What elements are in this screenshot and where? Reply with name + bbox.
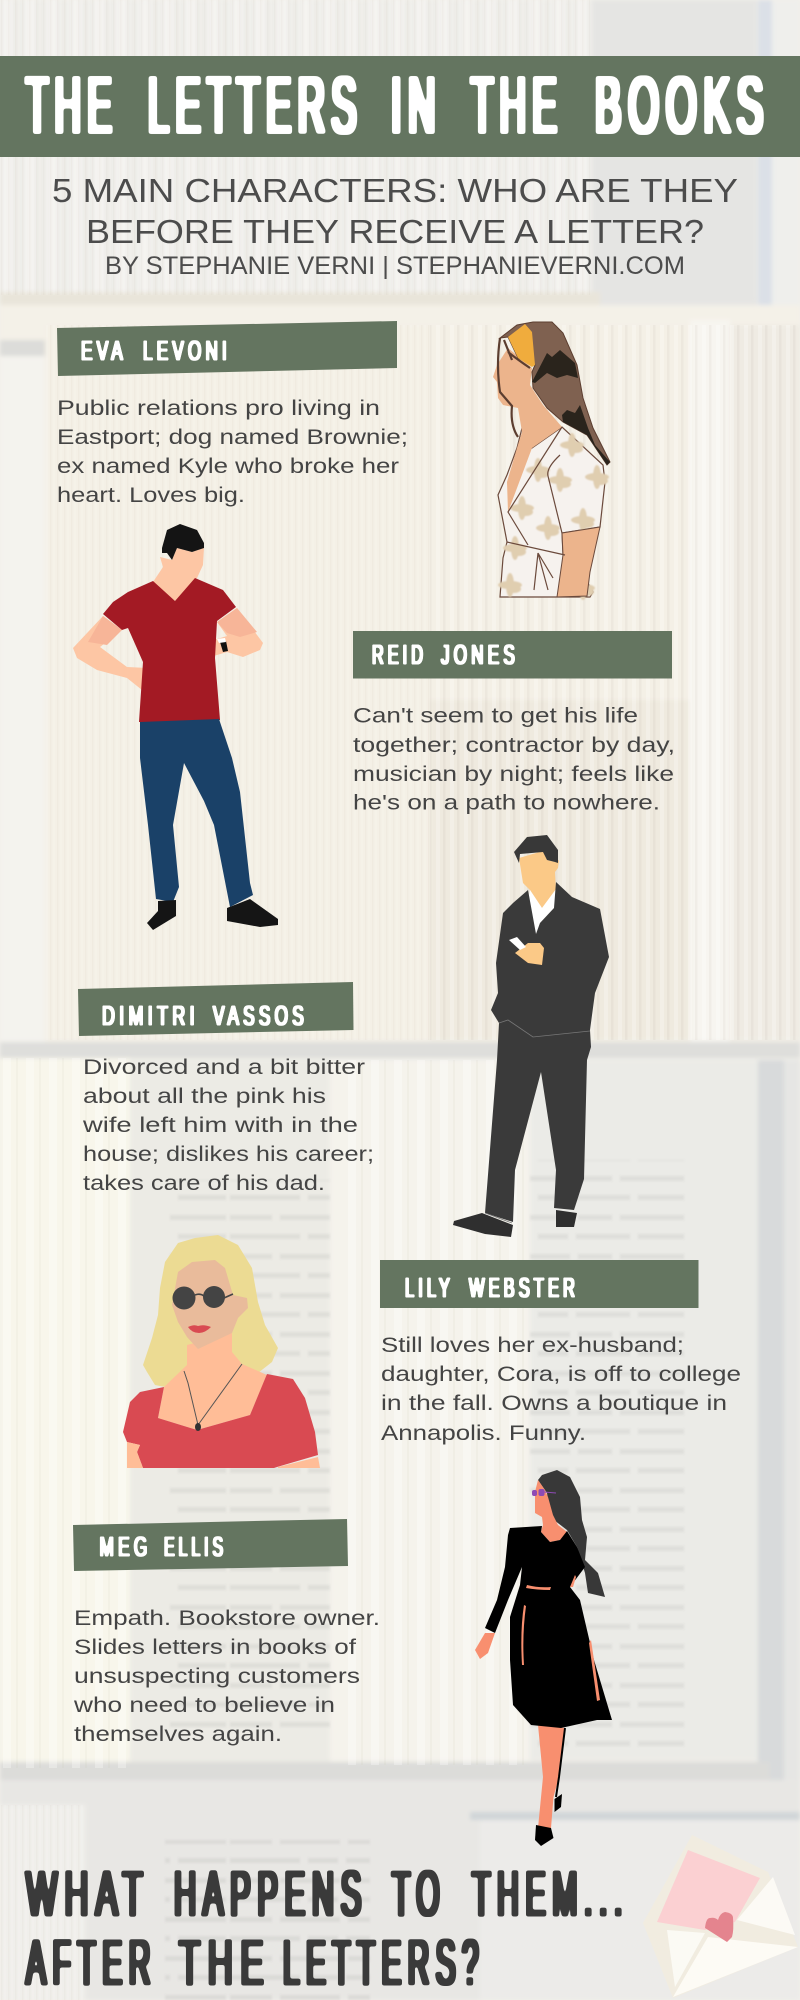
text: Reid: musician by night; feels like bbox=[353, 763, 674, 786]
closing headline bbox=[26, 1858, 629, 1998]
icon: envelope with heart seal bbox=[643, 1835, 798, 1998]
illustration: Eva bbox=[493, 322, 610, 600]
text: Dimitri bbox=[82, 1056, 374, 1195]
text: Eva: heart. Loves big. bbox=[57, 484, 245, 507]
heading banner: Dimitri: VASSOS bbox=[213, 1000, 308, 1031]
heading banner: Reid bbox=[353, 631, 672, 678]
text: Reid bbox=[353, 704, 675, 814]
illustration: blonde woman with round glasses bbox=[123, 1235, 320, 1468]
heading banner: Lily: WEBSTER bbox=[469, 1272, 579, 1303]
text: Meg: Slides letters in books of bbox=[74, 1636, 356, 1659]
text: Lily bbox=[381, 1334, 741, 1445]
text: Meg: unsuspecting customers bbox=[74, 1665, 360, 1688]
heading banner: Meg: MEG bbox=[100, 1531, 152, 1562]
text: Dimitri: Divorced and a bit bitter bbox=[83, 1056, 365, 1079]
heading banner: Eva: LEVONI bbox=[143, 335, 231, 366]
panel: Lily Webster bbox=[380, 1260, 741, 1445]
panel: Meg Ellis bbox=[73, 1519, 380, 1746]
illustration: man in red t-shirt bbox=[73, 524, 278, 930]
text: Reid: he's on a path to nowhere. bbox=[353, 792, 660, 814]
illustration: man in dark suit with phone bbox=[453, 835, 609, 1237]
text: Meg: themselves again. bbox=[74, 1723, 282, 1746]
panel: Eva Levoni bbox=[57, 321, 408, 507]
closing headline: LETTERS? bbox=[283, 1926, 485, 1998]
text: Reid: together; contractor by day, bbox=[353, 734, 675, 757]
title bbox=[26, 60, 770, 150]
subtitle bbox=[52, 172, 738, 280]
closing headline: TO bbox=[392, 1858, 446, 1930]
text: Meg: Empath. Bookstore owner. bbox=[74, 1607, 380, 1630]
text: THEM... bbox=[472, 1858, 629, 1930]
illustration: woman in black dress bbox=[475, 1470, 612, 1846]
text: Lily: Annapolis. Funny. bbox=[381, 1422, 586, 1445]
text: Lily: daughter, Cora, is off to college bbox=[381, 1363, 741, 1386]
title: IN bbox=[391, 60, 442, 150]
text: Dimitri: wife left him with in the bbox=[82, 1114, 358, 1137]
closing headline: WHAT bbox=[26, 1858, 150, 1930]
heading banner: Meg bbox=[73, 1519, 348, 1571]
subtitle: BEFORE THEY RECEIVE A LETTER? bbox=[86, 213, 704, 250]
title: LETTERS bbox=[148, 60, 363, 150]
text: Eva: Eastport; dog named Brownie; bbox=[57, 426, 408, 449]
heading banner: Lily: LILY bbox=[405, 1272, 454, 1303]
text: Dimitri: about all the pink his bbox=[83, 1085, 326, 1108]
heading banner: Eva bbox=[57, 321, 397, 376]
subtitle: 5 MAIN CHARACTERS: WHO ARE THEY bbox=[52, 172, 738, 209]
heading banner: Lily bbox=[380, 1260, 698, 1308]
text: Eva: Public relations pro living in bbox=[57, 397, 380, 420]
heading banner: Meg: ELLIS bbox=[164, 1531, 227, 1562]
heading banner: Dimitri: DIMITRI bbox=[102, 1000, 199, 1031]
heading banner: Reid: REID bbox=[372, 639, 427, 670]
text: Dimitri: house; dislikes his career; bbox=[83, 1143, 374, 1166]
closing headline: THE bbox=[179, 1926, 271, 1998]
text: Lily: Still loves her ex-husband; bbox=[381, 1334, 684, 1357]
text: Meg bbox=[73, 1607, 380, 1746]
text: Reid: Can't seem to get his life bbox=[353, 704, 638, 728]
subtitle: BY STEPHANIE VERNI | STEPHANIEVERNI.COM bbox=[105, 252, 685, 280]
panel: Dimitri Vassos bbox=[78, 982, 374, 1195]
heading banner: Dimitri bbox=[78, 982, 354, 1036]
text: Lily: in the fall. Owns a boutique in bbox=[381, 1392, 727, 1415]
closing headline: HAPPENS bbox=[174, 1858, 368, 1930]
text: Dimitri: takes care of his dad. bbox=[83, 1172, 325, 1195]
heading banner: Reid: JONES bbox=[441, 639, 519, 670]
title: THE bbox=[471, 60, 563, 150]
closing headline: AFTER bbox=[26, 1926, 157, 1998]
heading banner: Eva: EVA bbox=[81, 335, 127, 366]
text: Eva: ex named Kyle who broke her bbox=[57, 455, 399, 478]
panel: Reid Jones bbox=[353, 631, 675, 814]
title: THE bbox=[26, 60, 118, 150]
text: Eva bbox=[57, 397, 408, 507]
title banner bbox=[0, 56, 800, 157]
text: Meg: who need to believe in bbox=[73, 1694, 335, 1717]
